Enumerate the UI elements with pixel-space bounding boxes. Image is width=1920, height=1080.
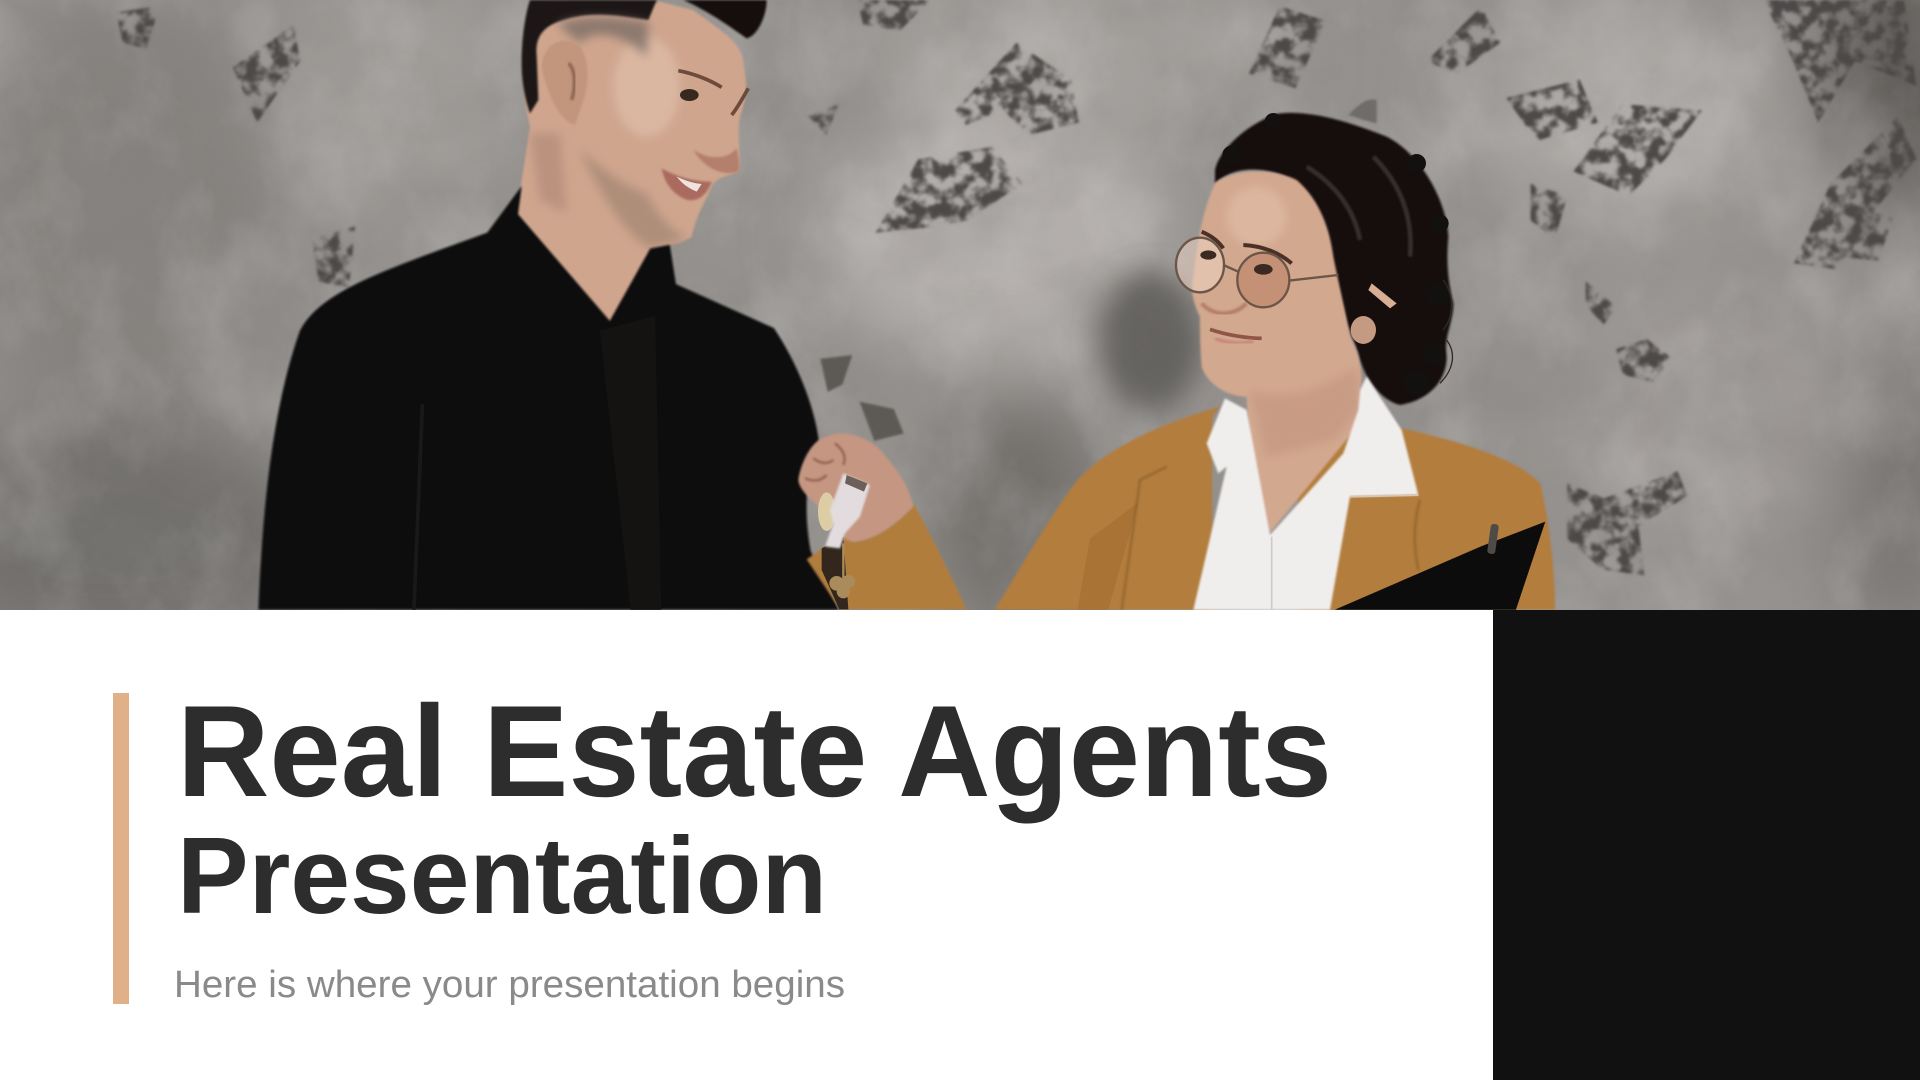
glasses: [1176, 238, 1338, 307]
eyebrows: [1202, 232, 1292, 263]
wall blemishes: [116, 0, 1916, 576]
stubble and neck shade: [580, 150, 688, 248]
neck shade: [1250, 367, 1360, 457]
ear and hair strand: [1351, 316, 1376, 344]
panel: black corner block: [1493, 610, 1920, 1080]
ear: [542, 41, 587, 125]
photo: two people exchanging keys in front of a concrete wall: [0, 0, 1920, 610]
face and neck skin: [1192, 172, 1361, 537]
mouth: [1210, 329, 1262, 338]
accent bar: [113, 693, 129, 1004]
nose shade: [693, 148, 739, 173]
hand holding keys: [798, 433, 967, 609]
sleeve: [807, 503, 967, 609]
shirt placket and seam: [414, 316, 661, 610]
hair fade: [557, 17, 648, 57]
hair: [522, 0, 657, 113]
face highlight: [613, 37, 680, 137]
hand: [798, 433, 913, 542]
lapel seams: [1122, 467, 1420, 610]
tagline text: Here is where your presentation begins: [174, 964, 845, 1006]
woman in mustard blazer: [994, 99, 1555, 610]
wall tuft above hair: [1348, 99, 1377, 123]
head: face, hair, ear: [517, 0, 767, 327]
shirt: [258, 186, 839, 610]
man in black shirt: [258, 0, 839, 610]
pen clip: [1487, 524, 1499, 554]
keys: [825, 473, 870, 548]
blazer lower body: [994, 407, 1555, 610]
clipboard: [1335, 522, 1545, 610]
hair: [1215, 113, 1453, 405]
head, hair and blouse detail: [1122, 99, 1453, 610]
sleeve gap shadow: [822, 537, 848, 609]
key ring: [818, 492, 835, 531]
concrete wall background: [0, 0, 1920, 661]
shadow beside woman's face: [1098, 270, 1202, 410]
mouth: [662, 168, 712, 200]
blouse and collar: [1193, 377, 1418, 610]
subtitle heading: Presentation: Presentation: [177, 815, 827, 937]
nose: [1202, 303, 1247, 313]
key chain and charm: [840, 543, 847, 587]
face and neck skin: [517, 2, 746, 327]
title: Real Estate Agents: Real Estate Agents: [177, 680, 1332, 824]
brow and eyes: [678, 71, 748, 115]
eyes: [1200, 250, 1216, 260]
